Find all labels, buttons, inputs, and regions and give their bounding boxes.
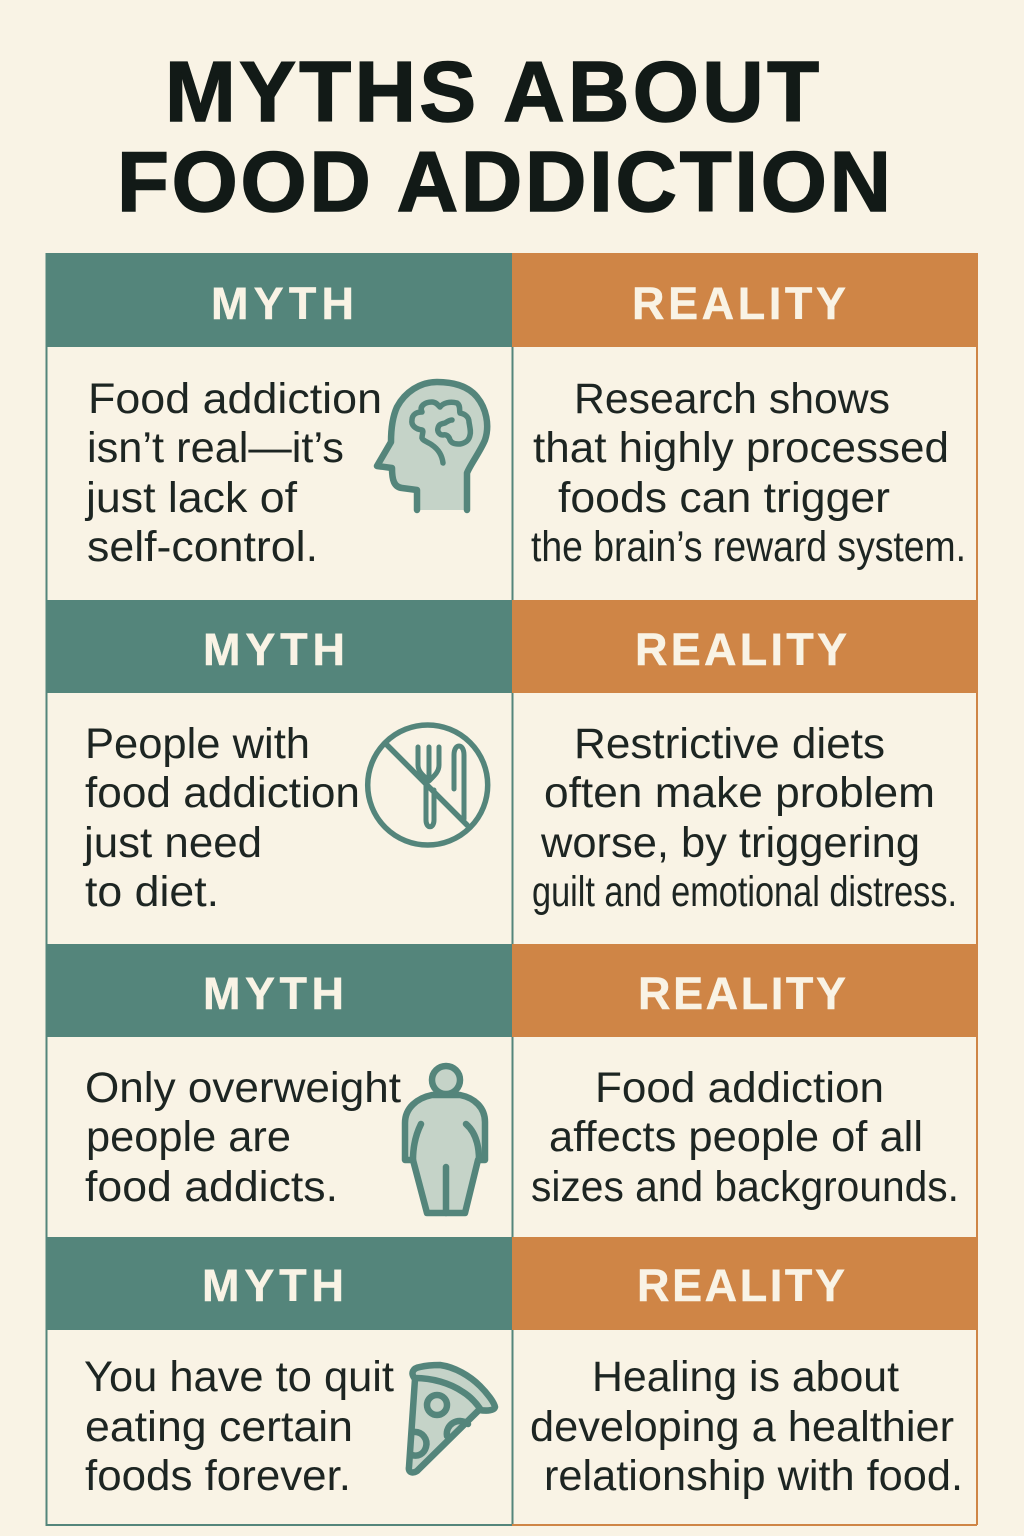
myth text 2: [82, 720, 360, 916]
reality text 3: sizes and backgrounds.: [531, 1163, 959, 1211]
table frame: [46, 253, 977, 1525]
reality text 2: Restrictive diets: [574, 720, 885, 768]
icon: overweight person: [405, 1066, 485, 1213]
reality text 1: the brain’s reward system.: [531, 523, 966, 571]
myth text 3: food addicts.: [85, 1163, 338, 1211]
reality text 4: developing a healthier: [530, 1403, 954, 1451]
row 4: [46, 1237, 977, 1500]
reality text 2: often make problem: [544, 769, 935, 817]
reality text 4: relationship with food.: [544, 1452, 963, 1500]
reality header 4: [512, 1237, 977, 1330]
reality header 3: [512, 944, 977, 1037]
reality header 1: [512, 253, 977, 347]
title: [117, 45, 891, 230]
icon: head with brain: [377, 382, 487, 510]
myth header 4: [46, 1237, 512, 1330]
row 2: [46, 600, 977, 916]
reality text 1: Research shows: [574, 375, 890, 423]
myth text 4: [84, 1353, 394, 1500]
reality text 3: affects people of all: [549, 1113, 923, 1161]
title: FOOD ADDICTION: [117, 135, 891, 230]
myth text 4: You have to quit: [84, 1353, 394, 1401]
reality text 3: [531, 1064, 959, 1211]
myth text 2: food addiction: [85, 769, 360, 817]
myth text 1: self-control.: [87, 523, 318, 571]
myth text 2: just need: [82, 819, 262, 867]
icon: pizza slice: [408, 1365, 495, 1472]
row 1: [46, 253, 977, 571]
myth header 1: MYTH: [211, 278, 354, 329]
myth text 1: [84, 375, 382, 571]
reality text 1: foods can trigger: [558, 474, 890, 522]
myth text 2: to diet.: [85, 868, 219, 916]
myth text 1: isn’t real—it’s: [87, 424, 344, 472]
myth text 3: Only overweight: [85, 1064, 401, 1112]
myth text 4: eating certain: [85, 1403, 353, 1451]
reality header 2: [512, 600, 977, 693]
myth text 2: People with: [85, 720, 310, 768]
myth text 1: just lack of: [84, 474, 298, 522]
reality header 4: REALITY: [637, 1260, 845, 1311]
title: MYTHS ABOUT: [165, 45, 819, 140]
myth header 3: [46, 944, 512, 1037]
reality text 2: worse, by triggering: [540, 819, 920, 867]
reality text 1: [531, 375, 966, 571]
reality header 3: REALITY: [638, 968, 846, 1019]
reality text 2: [532, 720, 957, 916]
myth text 3: [85, 1064, 401, 1211]
reality text 3: Food addiction: [595, 1064, 884, 1112]
myth header 4: MYTH: [202, 1260, 344, 1311]
myth header 3: MYTH: [203, 968, 344, 1019]
icon: no fork and knife: [368, 725, 488, 845]
myth header 2: MYTH: [203, 624, 345, 675]
myth text 4: foods forever.: [85, 1452, 351, 1500]
myth text 3: people are: [86, 1113, 291, 1161]
reality text 1: that highly processed: [533, 424, 949, 472]
myth text 1: Food addiction: [88, 375, 382, 423]
myth header 2: [46, 600, 512, 693]
reality text 4: Healing is about: [592, 1353, 899, 1401]
reality header 2: REALITY: [635, 624, 847, 675]
myth header 1: [46, 253, 512, 347]
reality text 4: [530, 1353, 963, 1500]
reality header 1: REALITY: [632, 278, 846, 329]
row 3: [46, 944, 977, 1213]
